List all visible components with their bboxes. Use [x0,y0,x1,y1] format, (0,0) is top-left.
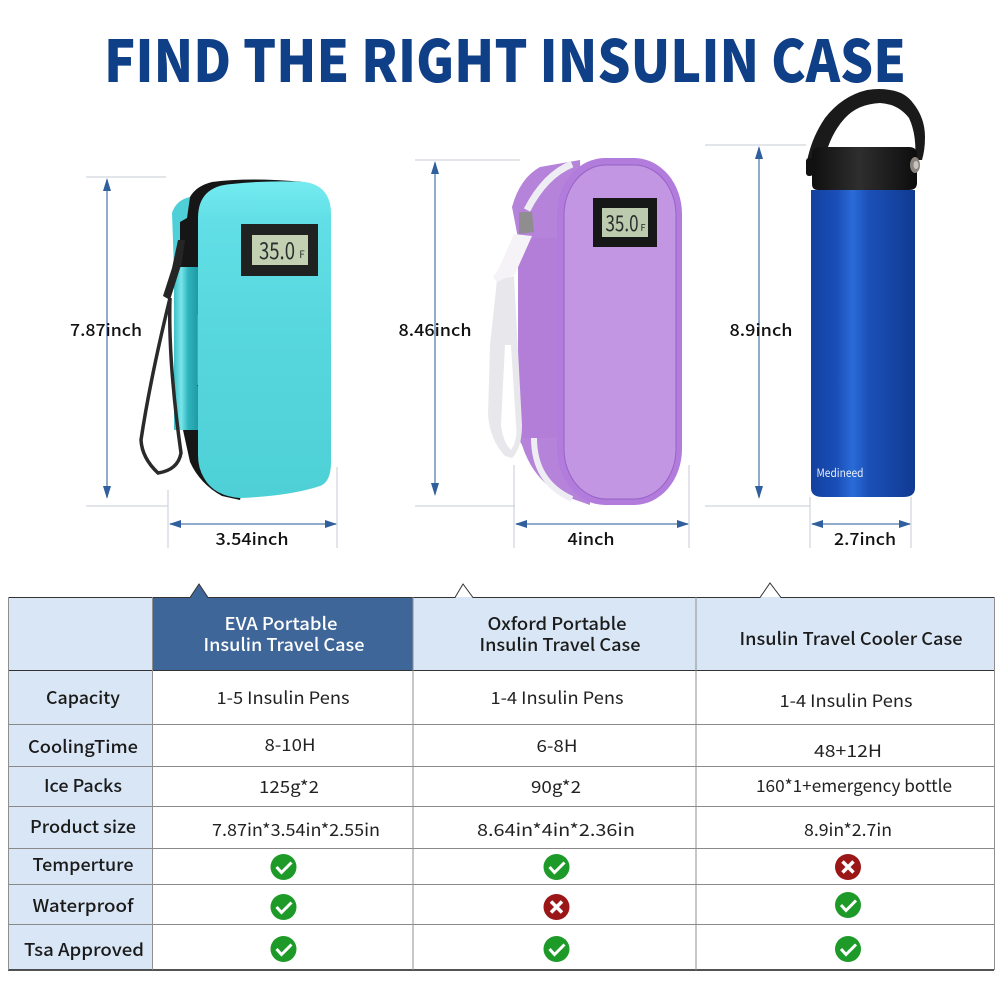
icon: check [270,854,296,880]
table values: 8-10H [264,731,316,756]
dimension: bottle width [810,497,911,550]
column headings: EVA Portable [224,611,338,636]
case side shell [172,197,198,432]
table header backgrounds [8,584,994,970]
dimension: bottle height [705,145,810,506]
dimension: purple case height [398,160,520,506]
bottle handle [806,89,925,172]
table values: 7.87in*3.54in*2.55in [212,816,380,841]
status icons [270,854,861,962]
column headings: Insulin Travel Case [204,632,365,657]
display [593,198,657,247]
comparison table [8,583,994,970]
case front [557,158,682,505]
icon: teal EVA case: 35.0 [259,232,295,266]
dimension: purple case width: 4inch [568,526,614,550]
row labels [24,685,144,962]
dimension: purple case height: 8.46inch [398,317,472,341]
icon: teal EVA case [141,180,331,500]
row labels: Capacity [46,685,120,710]
icon: check [835,892,861,918]
table values: 160*1+emergency bottle [756,772,952,797]
title: FIND THE RIGHT INSULIN CASE [104,15,906,99]
dimension: teal case width [168,467,337,550]
table values: 6-8H [536,732,578,757]
table values: 125g*2 [259,773,319,798]
column headings: Oxford Portable [488,611,627,636]
dimension: teal case height: 7.87inch [70,317,142,341]
table values: 48+12H [814,737,882,762]
table values: 1-5 Insulin Pens [216,684,350,709]
row labels: Product size [30,814,136,839]
table values: 8.9in*2.7in [804,816,892,841]
black zip edge [180,180,310,500]
icon: purple Oxford case [488,158,682,505]
dimension: purple case width [514,465,689,550]
table values [212,684,952,841]
display [241,224,318,276]
icon: blue insulin cooler bottle [806,89,925,497]
table values: 8.64in*4in*2.36in [477,816,635,841]
bottle cap [812,147,917,190]
icon: check [270,936,296,962]
table values: 1-4 Insulin Pens [490,684,624,709]
case back shell [512,160,590,505]
wrist strap [141,298,181,473]
icon: teal EVA case: F [299,246,305,261]
icon: cross [544,894,570,920]
table values: 90g*2 [531,773,581,798]
icon: check [544,936,570,962]
column headings: Insulin Travel Case [480,632,641,657]
case front [198,181,331,498]
dimension: teal case width: 3.54inch [216,526,288,550]
dimension: teal case height [70,177,168,506]
row labels: Temperture [32,852,134,877]
dimension: bottle height: 8.9inch [730,317,792,341]
icon: check [835,936,861,962]
side panel [519,238,558,438]
column headings [204,611,963,657]
table grid [8,583,994,970]
icon: check [270,894,296,920]
bottle body [811,190,915,497]
row labels: Ice Packs [44,773,122,798]
row labels: Tsa Approved [24,937,144,962]
brand label: Medineed [816,465,864,481]
column headings: Insulin Travel Cooler Case [740,626,963,651]
zipper [527,164,572,210]
side pen band [174,267,198,430]
icon: check [544,854,570,880]
zipper pull [519,212,534,234]
dimension: bottle width: 2.7inch [834,526,896,550]
icon: cross [835,854,861,880]
side clip [197,315,205,386]
wrist strap [488,276,522,458]
icon: purple Oxford case: 35.0 [606,206,638,238]
table values: 1-4 Insulin Pens [780,687,913,712]
row labels: Waterproof [32,893,135,918]
row labels: CoolingTime [28,734,138,759]
icon: purple Oxford case: F [641,221,646,234]
